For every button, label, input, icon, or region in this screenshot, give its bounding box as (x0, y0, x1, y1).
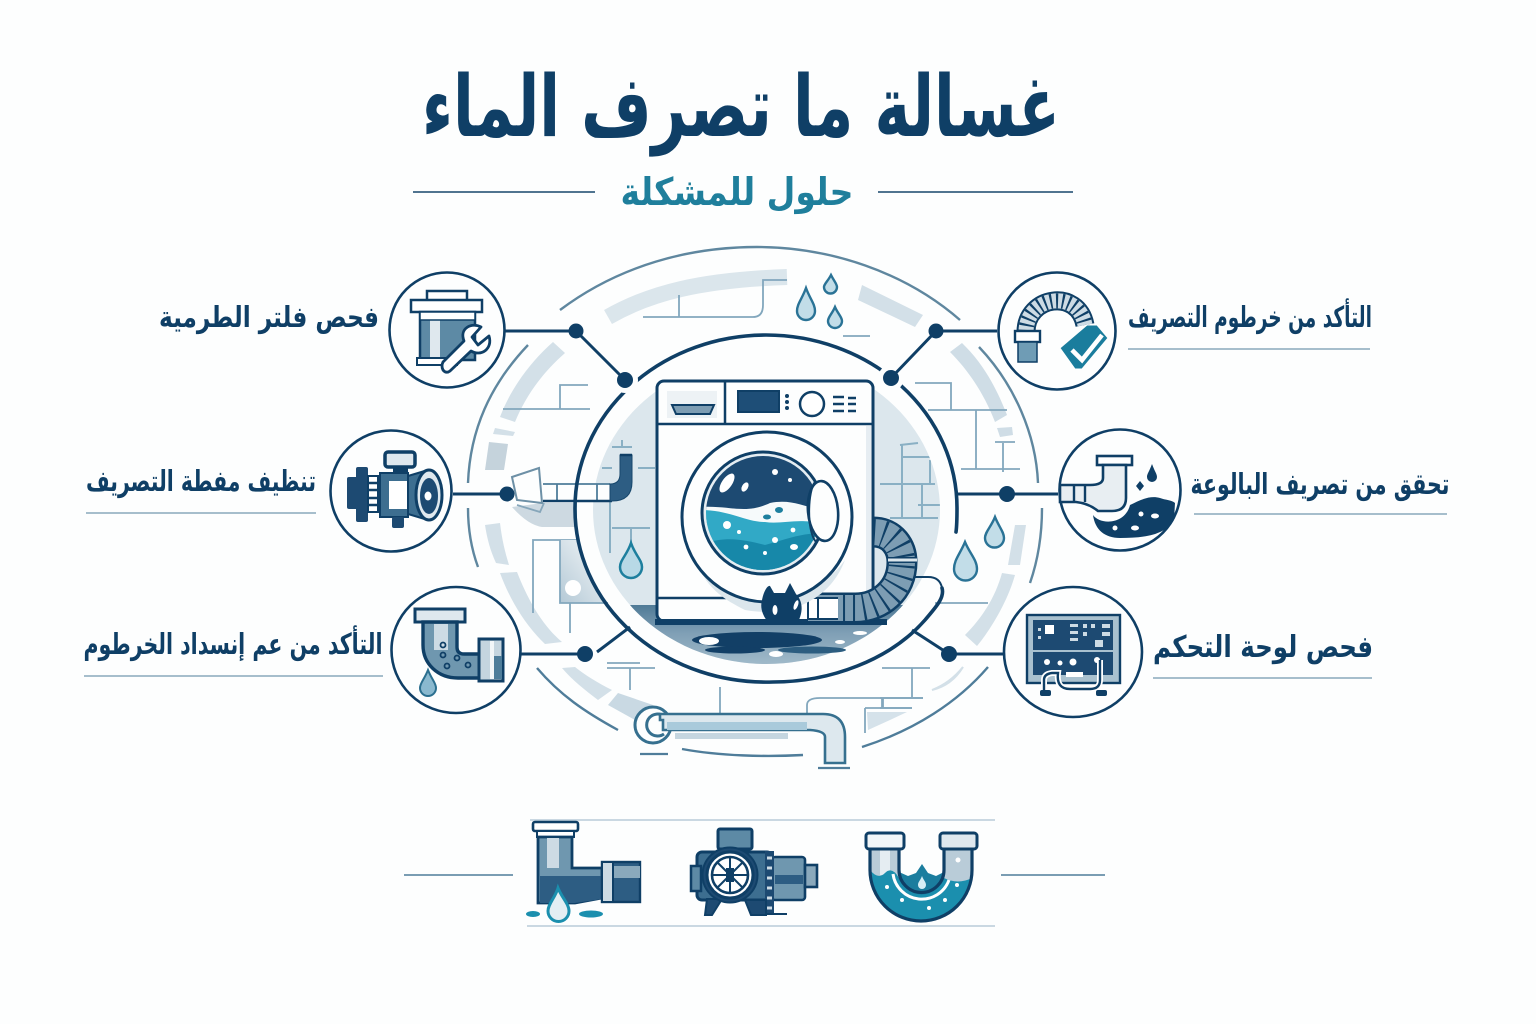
title: غسالة ما تصرف الماء (422, 58, 1060, 157)
washing machine (655, 381, 887, 625)
icon: U-trap (866, 833, 977, 921)
door with drum and water (682, 432, 852, 612)
icon: control panel (1004, 587, 1142, 717)
bottom drain pipe (635, 707, 845, 763)
connectors and nodes (453, 324, 1058, 662)
icon: leaking pipe (526, 822, 640, 922)
icon: floor drain (1060, 430, 1180, 550)
main machine disc (593, 390, 940, 664)
label: clean drain: تنظيف مفطة التصريف (86, 464, 316, 498)
left drain pipe with fitting (512, 455, 632, 527)
icon: hose with check mark (998, 272, 1116, 390)
label: check filter: فحص فلتر الطرمية (159, 300, 379, 334)
icon: drain fitting (330, 430, 452, 552)
icon: clogged elbow pipe (392, 587, 520, 713)
sink on left wall (560, 540, 608, 603)
label: control panel: فحص لوحة التحكم (1153, 630, 1373, 665)
label: hose blockage: التأكد من عم إنسداد الخرطوم (84, 625, 382, 662)
label: drain hose check: التأكد من خرطوم التصريف (1128, 298, 1372, 334)
drain hose (808, 532, 942, 619)
icon: drain pump (691, 829, 817, 915)
icon: filter and wrench (390, 272, 504, 388)
water drops on wall (797, 275, 1004, 580)
subtitle with side rules: حلول للمشكلة (620, 170, 854, 214)
main ring (575, 335, 957, 682)
background rings and wall (468, 247, 1042, 768)
leak splash (761, 583, 802, 622)
bottom rules (404, 820, 1105, 926)
water drop near sink (620, 543, 642, 578)
